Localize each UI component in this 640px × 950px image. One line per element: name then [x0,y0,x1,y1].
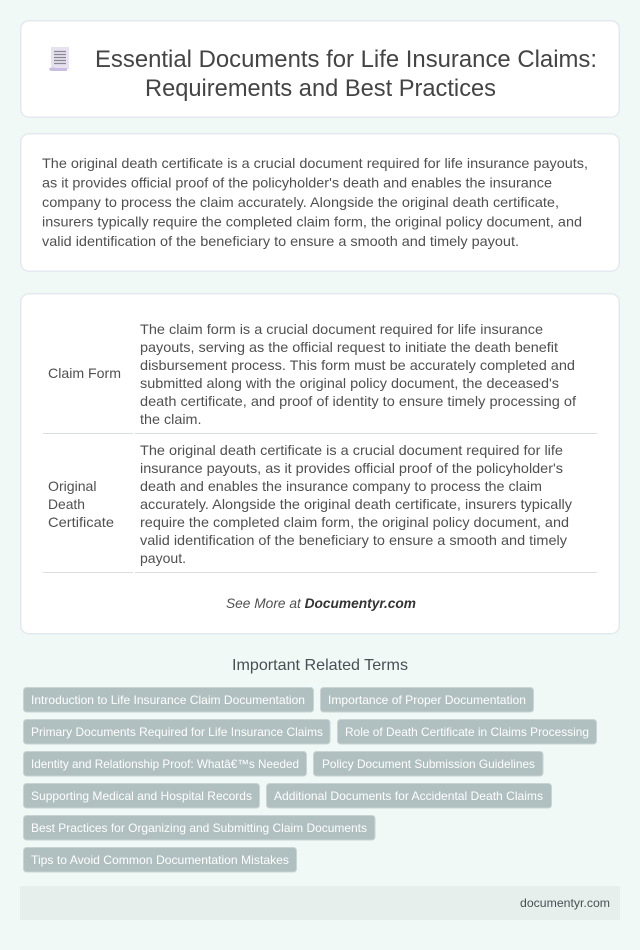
table row: original death certificate: insurance payouts, as it provides official proof of the policyholder's [140,460,563,476]
table row: original death certificate: require the completed claim form, the original policy document, and [140,514,569,530]
table row: claim form: The claim form is a crucial document required for life insurance [140,321,543,337]
text block: introduction paragraph: The original death certificate is a crucial document required for life insurance payouts, [42,155,588,171]
table row: claim form [43,321,597,434]
tag: policy document: Policy Document Submission Guidelines [322,757,535,771]
text block: introduction paragraph: company to process the claim accurately. Alongside the original death certificate, [42,194,559,210]
heading: important related terms: Important Related Terms [232,657,408,674]
table row: claim form: disbursement process. This form must be accurately completed and [140,357,575,373]
text block: introduction paragraph [42,155,588,249]
tag: importance: Importance of Proper Documentation [328,693,526,707]
title: Requirements and Best Practices [145,75,496,102]
tag: introduction: Introduction to Life Insurance Claim Documentation [31,693,305,707]
tag: medical records [24,784,260,808]
title: Essential Documents for Life Insurance Claims: [95,46,597,73]
table row: claim form: Claim Form [48,365,121,381]
table row: original death certificate: death and enables the insurance company to process the claim [140,478,542,494]
footer: documentyr.com [520,896,610,910]
tag: best practices: Best Practices for Organizing and Submitting Claim Documents [31,821,367,835]
title [95,46,597,102]
tag: role of death certificate [338,720,596,744]
table row: original death certificate: valid identification of the beneficiary to ensure a smooth and timely [140,532,567,548]
table row: claim form: payouts, serving as the official request to initiate the death benefit [140,339,558,355]
tag: tips [24,848,296,872]
icon: document receipt [49,47,69,71]
panel: introduction [21,134,619,271]
table row: original death certificate: The original death certificate is a crucial document required for life [140,442,563,458]
footer [20,886,620,920]
tag: importance [320,688,534,712]
tag: best practices [24,816,375,840]
tag: identity and relationship [24,752,306,776]
tag: identity and relationship: Identity and Relationship Proof: Whatâ€™s Needed [31,757,299,771]
tag: introduction [24,688,314,712]
tag: role of death certificate: Role of Death Certificate in Claims Processing [345,725,589,739]
panel: documents table [21,294,619,634]
table row: claim form: submitted along with the original policy document, the deceased's [140,375,559,391]
tag: medical records: Supporting Medical and Hospital Records [31,789,252,803]
table row: original death certificate: payout. [140,550,186,566]
tag: accidental death [266,784,552,808]
table row: original death certificate [43,442,597,573]
tag: accidental death: Additional Documents for Accidental Death Claims [274,789,543,803]
panel: header [21,21,619,117]
table row: original death certificate: Death [48,496,85,512]
table row: claim form: death certificate, and proof of identity to ensure timely processing of [140,393,576,409]
table row: original death certificate: accurately. Alongside the original death certificate, insurers typically [140,496,572,512]
tag: primary documents [24,720,330,744]
text block: introduction paragraph: insurers typically require the completed claim form, the original policy document, and [42,214,582,230]
table row: original death certificate: Original [48,478,96,494]
related term tags [24,688,596,872]
text block: introduction paragraph: as it provides official proof of the policyholder's death and enables the insurance [42,174,552,190]
tag: tips: Tips to Avoid Common Documentation Mistakes [31,853,289,867]
table row: original death certificate: Certificate [48,514,114,530]
table row: claim form: the claim. [140,411,202,427]
text block: introduction paragraph: valid identification of the beneficiary to ensure a smooth and timely payout. [42,233,519,249]
tag: policy document [314,752,543,776]
tag: primary documents: Primary Documents Required for Life Insurance Claims [31,725,323,739]
see more link: See More at Documentyr.com [226,595,416,611]
